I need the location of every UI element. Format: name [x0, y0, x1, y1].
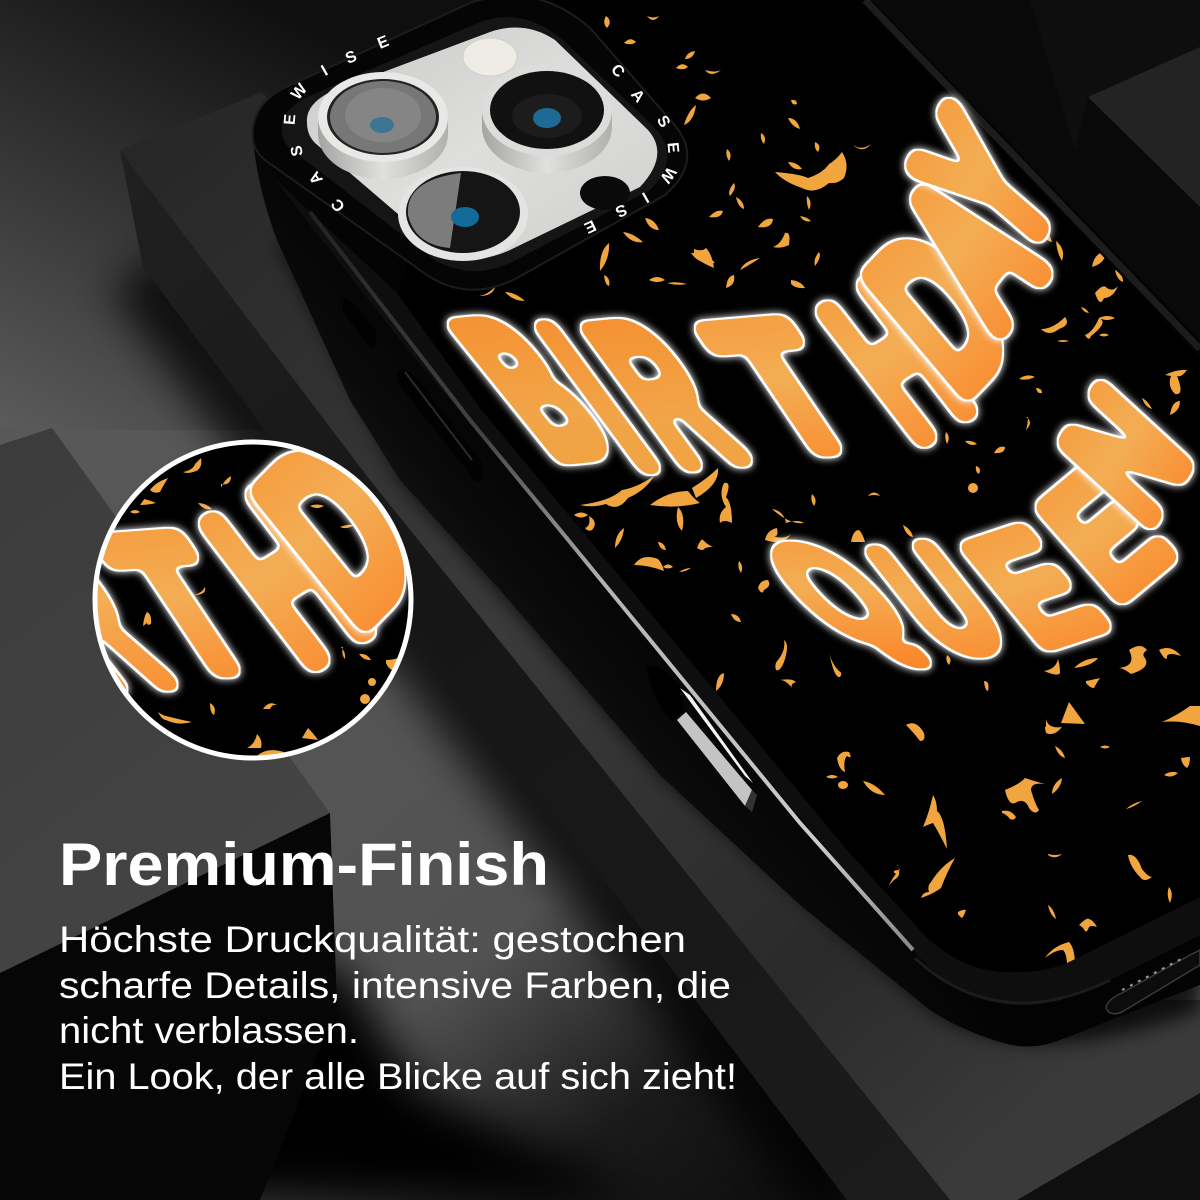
- lens bottom: [398, 167, 528, 261]
- inset letters: D: [223, 398, 450, 666]
- zoom inset circle: [92, 440, 414, 760]
- phone case body: [253, 0, 1200, 1047]
- lettering: QUEEN: U: [842, 516, 1037, 682]
- rim band: [273, 177, 1200, 1005]
- glossy highlight on left rim: [310, 212, 913, 950]
- body text: scharfe Details, intensive Farben, die: [59, 965, 731, 1006]
- CASEWISE ring text left: S: [343, 48, 360, 68]
- lettering: BIRTHDAY: R: [553, 288, 776, 501]
- CASEWISE ring text left: I: [319, 63, 331, 80]
- body text: Höchste Druckqualität: gestochen: [59, 919, 686, 960]
- lens top right: [482, 64, 612, 173]
- lettering: BIRTHDAY: H: [789, 244, 1004, 479]
- lettering: QUEEN: Q: [733, 521, 942, 665]
- lettering: BIRTHDAY: Y: [882, 78, 1089, 289]
- lettering: BIRTHDAY: T: [678, 289, 892, 486]
- body text: Ein Look, der alle Blicke auf sich zieht!: [59, 1056, 737, 1097]
- heading: Premium-Finish: [59, 831, 549, 898]
- CASEWISE ring text left: S: [288, 144, 307, 158]
- lettering: BIRTHDAY: B: [418, 285, 647, 493]
- CASEWISE ring text left: A: [306, 168, 327, 187]
- CASEWISE ring text left: W: [288, 80, 311, 103]
- right edge of the case: [865, 0, 1200, 349]
- glass plate: [307, 28, 657, 259]
- lettering: QUEEN: E: [937, 500, 1130, 674]
- CASEWISE ring text left: E: [375, 33, 392, 53]
- inset letters: T: [74, 502, 290, 708]
- silver side button: [677, 688, 757, 812]
- CASEWISE ring text left: [282, 33, 392, 215]
- outer black bumper: [253, 0, 687, 290]
- bottom rim sheen: [915, 958, 1110, 1003]
- printed orange flecks: [479, 16, 1200, 966]
- CASEWISE ring text left: E: [282, 113, 299, 126]
- body text: nicht verblassen.: [59, 1010, 359, 1051]
- CASEWISE ring text right: S: [653, 113, 673, 131]
- lettering: BIRTHDAY: A: [870, 138, 1073, 360]
- CASEWISE ring text right: W: [656, 164, 679, 186]
- lens top left: [318, 72, 448, 179]
- camera island: [253, 0, 687, 290]
- body text: [59, 919, 737, 1097]
- inset flecks: [130, 458, 398, 762]
- flash: [463, 38, 517, 76]
- lettering: QUEEN: E: [1013, 439, 1196, 628]
- CASEWISE ring text right: E: [664, 142, 681, 154]
- lettering: BIRTHDAY: I: [506, 290, 690, 505]
- inset letters: H: [170, 448, 404, 705]
- phone shadow: [277, 240, 1200, 1042]
- CASEWISE ring text right: I: [639, 188, 651, 205]
- lettering: BIRTHDAY: [418, 78, 1089, 505]
- ring band: [282, 17, 667, 271]
- CASEWISE ring text right: E: [581, 216, 598, 236]
- microphone hole: [580, 176, 630, 210]
- lettering: BIRTHDAY: D: [835, 191, 1044, 431]
- CASEWISE ring text right: A: [627, 86, 648, 106]
- CASEWISE ring text left: C: [328, 195, 349, 215]
- CASEWISE ring text right: C: [607, 61, 628, 81]
- side buttons: [342, 298, 684, 722]
- phone back face with printed design: [397, 0, 1200, 972]
- bottom speaker slot: [1106, 950, 1200, 1014]
- CASEWISE ring text right: [581, 61, 681, 236]
- CASEWISE ring text right: S: [612, 200, 629, 220]
- lettering: QUEEN: [733, 358, 1200, 682]
